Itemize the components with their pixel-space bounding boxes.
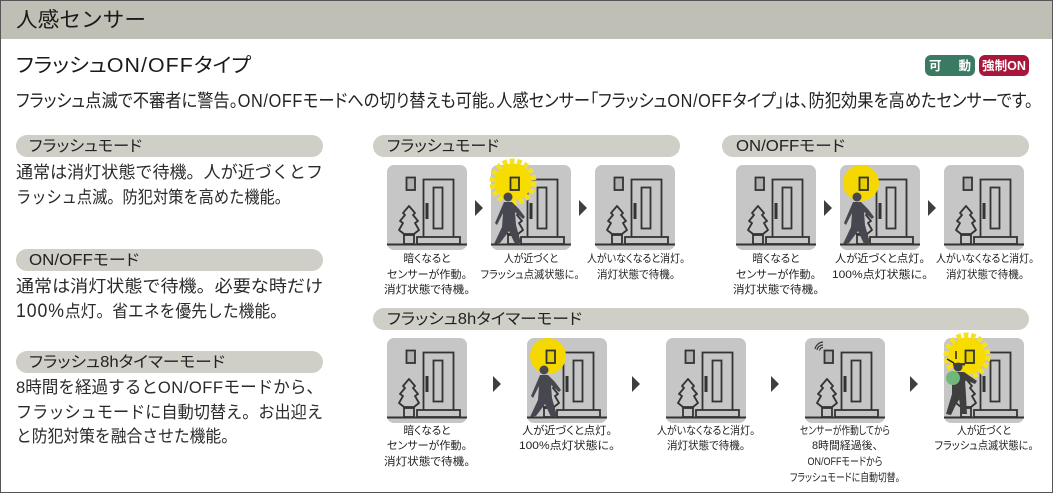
panel: on/off mode diagram: 消灯状態で待機。 — [946, 267, 1024, 281]
panel: flash 8h timer mode description: 8時間を経過するとON/OFFモードから、 — [16, 378, 323, 397]
panel: flash 8h timer mode diagram — [373, 308, 1034, 484]
panel: flash 8h timer mode diagram: 人が近づくと — [957, 423, 1011, 437]
panel: flash 8h timer mode diagram: センサーが作動。 — [387, 438, 467, 452]
panel: flash 8h timer mode diagram: フラッシュモードに自動切替。 — [790, 470, 900, 484]
panel: on/off mode diagram: 人がいなくなると消灯。 — [936, 251, 1034, 265]
panel: flash 8h timer mode description: と防犯対策を融合させた機能。 — [16, 427, 237, 446]
panel: flash mode diagram: フラッシュモード — [387, 138, 499, 155]
panel: flash mode description: 通常は消灯状態で待機。人が近づくとフ — [16, 163, 323, 182]
panel: flash 8h timer mode diagram: 消灯状態で待機。 — [384, 454, 470, 468]
panel: on/off mode description: 通常は消灯状態で待機。必要な時だけ — [16, 277, 323, 296]
badge: movable — [925, 55, 975, 76]
panel: flash 8h timer mode description: フラッシュモードに自動切替え。お出迎え — [16, 403, 323, 422]
panel: flash 8h timer mode diagram: フラッシュ8hタイマーモード — [387, 310, 582, 328]
panel: on/off mode diagram: ON/OFFモード — [736, 138, 845, 155]
panel: on/off mode diagram: 100%点灯状態に。 — [832, 267, 928, 281]
panel: flash 8h timer mode description: フラッシュ8hタイマーモード — [29, 353, 225, 371]
panel: flash mode description: ラッシュ点滅。防犯対策を高めた機能。 — [16, 188, 290, 207]
panel: flash mode diagram: センサーが作動。 — [387, 267, 467, 281]
panel: flash mode diagram: 消灯状態で待機。 — [384, 282, 470, 296]
panel: flash mode diagram: 人がいなくなると消灯。 — [587, 251, 685, 265]
icon: signal waves — [815, 342, 823, 350]
badge: forced on — [979, 55, 1029, 76]
panel: flash 8h timer mode diagram: 人が近づくと点灯。 — [522, 423, 612, 437]
panel: flash 8h timer mode diagram: 暗くなると — [404, 424, 450, 437]
panel: on/off mode diagram — [722, 135, 1034, 296]
panel: flash mode description: フラッシュモード — [29, 138, 142, 155]
icon: startled person — [946, 362, 977, 415]
panel: flash mode diagram: 人が近づくと — [504, 251, 558, 265]
panel: flash 8h timer mode description — [16, 351, 323, 446]
panel: on/off mode diagram: 暗くなると — [752, 252, 800, 265]
panel: flash 8h timer mode diagram: 消灯状態で待機。 — [667, 438, 745, 452]
panel: flash 8h timer mode diagram: 人がいなくなると消灯。 — [657, 423, 755, 437]
panel: on/off mode diagram: 人が近づくと点灯。 — [835, 251, 925, 265]
panel: flash 8h timer mode diagram: センサーが作動してから — [800, 423, 890, 437]
panel: on/off mode diagram: センサーが作動。 — [736, 267, 816, 281]
icon: alarm marks — [947, 351, 956, 363]
badge: forced on: 強制ON — [982, 58, 1026, 73]
panel: flash mode description — [16, 135, 323, 207]
panel: on/off mode description — [16, 249, 323, 322]
page title: 人感センサー — [16, 9, 146, 32]
panel: flash mode diagram: フラッシュ点滅状態に。 — [480, 267, 580, 281]
panel: on/off mode description: 100%点灯。省エネを優先した機能。 — [16, 301, 286, 322]
panel: on/off mode description: ON/OFFモード — [29, 252, 139, 269]
panel: flash mode diagram: 消灯状態で待機。 — [597, 267, 675, 281]
panel: flash 8h timer mode diagram: フラッシュ点滅状態に。 — [934, 438, 1034, 452]
panel: flash 8h timer mode diagram: 100%点灯状態に。 — [519, 438, 615, 452]
description: フラッシュ点滅で不審者に警告。ON/OFFモードへの切り替えも可能。人感センサー「フラッシュON/OFFタイプ」は、防犯効果を高めたセンサーです。 — [16, 91, 1033, 111]
panel: flash 8h timer mode diagram: 8時間経過後、 — [812, 438, 878, 452]
badge: movable: 可 動 — [929, 58, 971, 73]
panel: on/off mode diagram: 消灯状態で待機。 — [733, 282, 819, 296]
heading: sensor type: フラッシュ ON/OFF タイプ — [16, 54, 251, 77]
panel: flash mode diagram: 暗くなると — [404, 252, 450, 265]
panel: flash mode diagram — [373, 135, 685, 296]
header band — [1, 1, 1052, 39]
panel: flash 8h timer mode diagram: ON/OFFモードから — [808, 455, 882, 468]
